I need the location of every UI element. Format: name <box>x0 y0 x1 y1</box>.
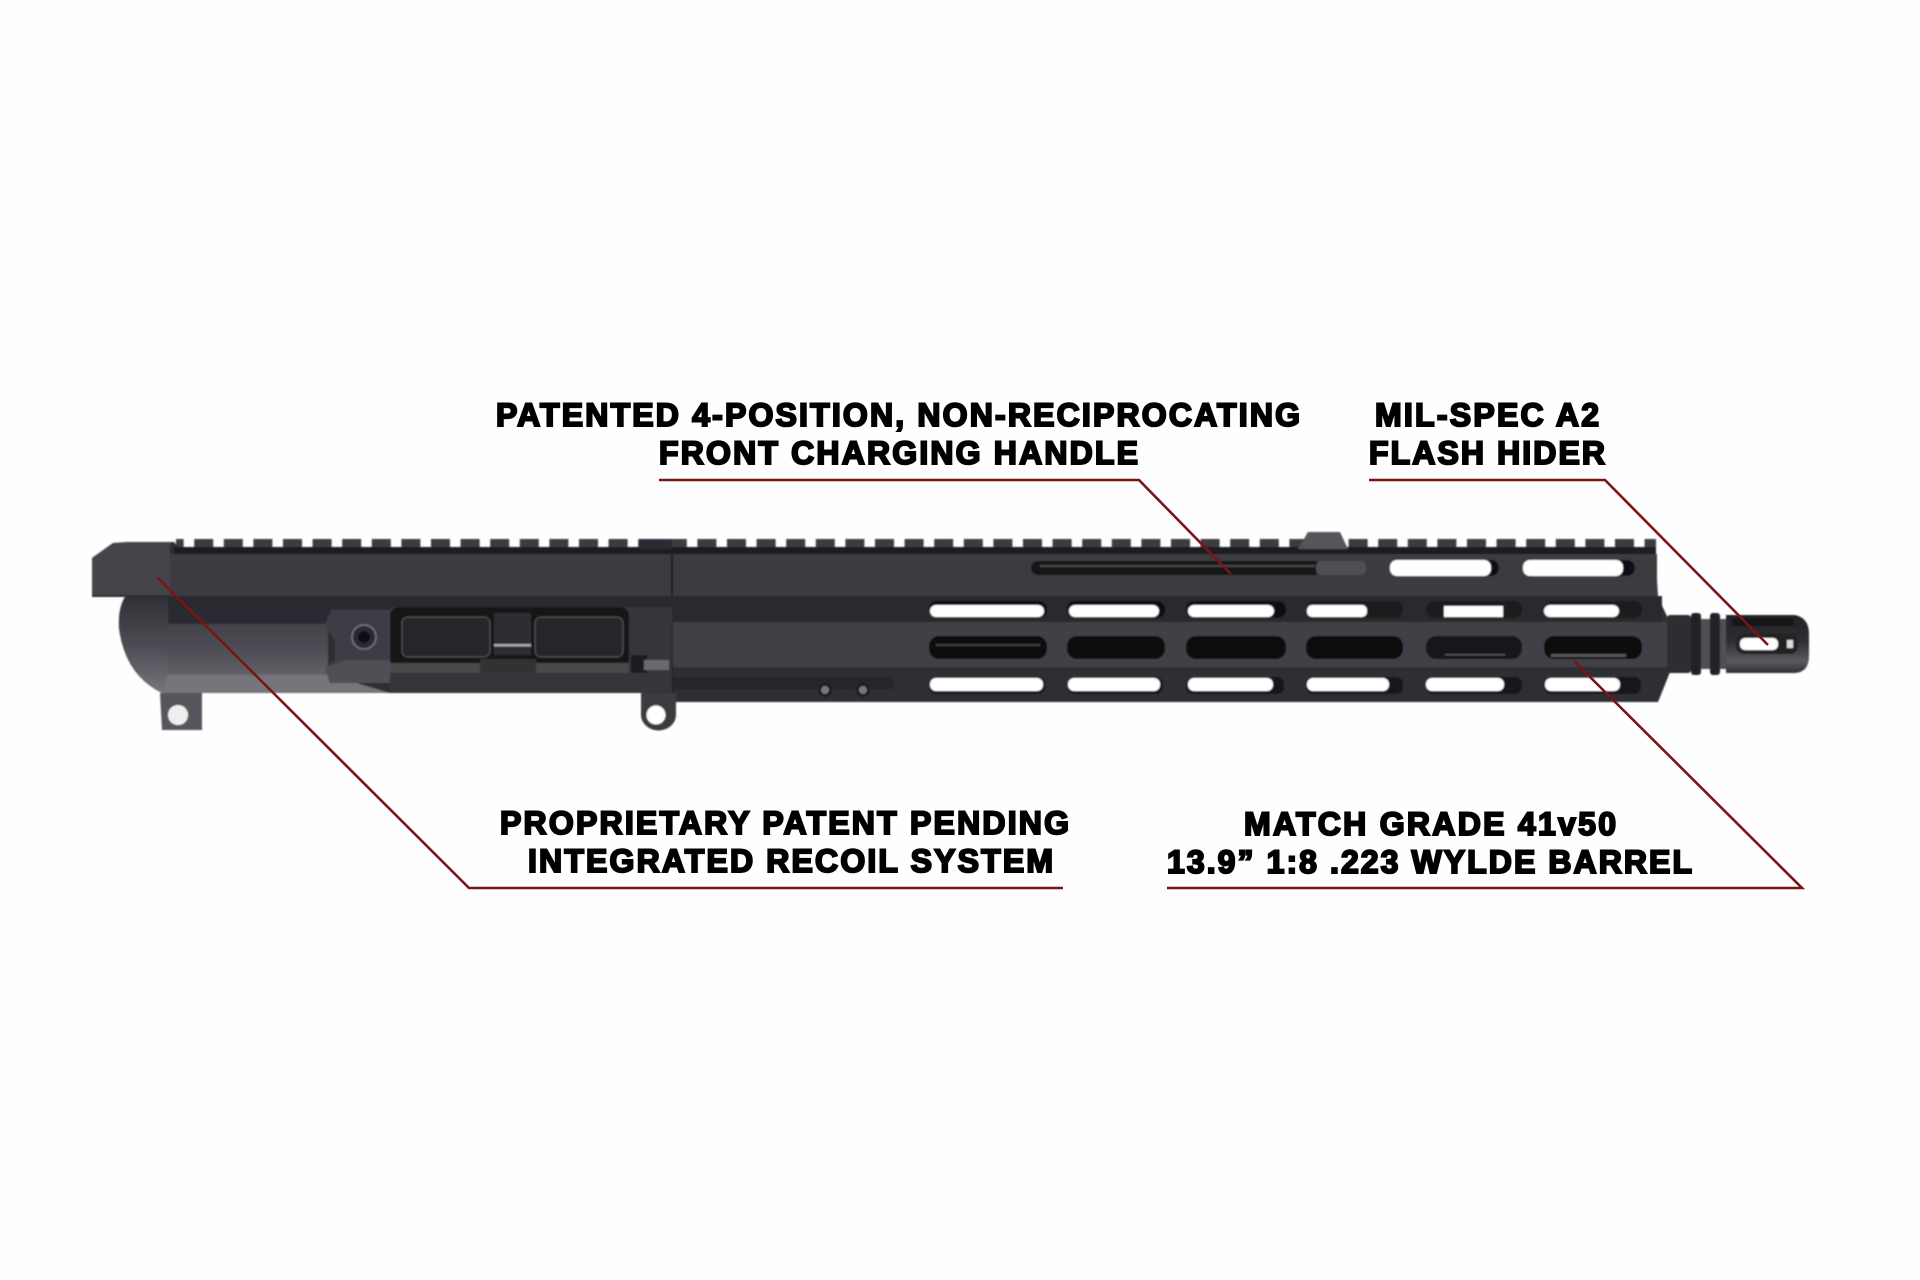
product photo: rifle upper receiver <box>92 532 1809 730</box>
heading: recoil system: INTEGRATED RECOIL SYSTEM <box>528 843 1053 879</box>
heading: barrel: MATCH GRADE 41v50 <box>1244 806 1616 842</box>
forward assist <box>631 655 669 673</box>
M-LOK slots: lower row <box>929 677 1641 694</box>
side panel bright strip <box>162 675 390 693</box>
heading: charging handle <box>496 397 1300 471</box>
upper side band <box>170 554 1657 596</box>
callout: flash hider <box>1369 397 1768 645</box>
top rail shadow strip <box>174 547 1656 554</box>
heading: recoil system: PROPRIETARY PATENT PENDING <box>500 805 1069 841</box>
callout: charging handle <box>496 397 1300 574</box>
side panel upper shadow <box>168 596 390 624</box>
pivot pins <box>673 677 893 697</box>
leader line: recoil system <box>158 578 1063 888</box>
rear cap <box>92 542 170 595</box>
rail block at seam <box>639 539 672 549</box>
handguard lower band <box>673 670 1658 702</box>
rear takedown lug <box>160 693 202 730</box>
M-LOK slots: top row <box>1390 560 1635 576</box>
leader line: charging handle <box>659 480 1231 574</box>
receiver and handguard silhouette <box>92 542 1672 702</box>
receiver mid band <box>390 607 672 693</box>
heading: flash hider: FLASH HIDER <box>1369 435 1605 471</box>
M-LOK slots: middle row <box>929 636 1642 659</box>
charging handle nub <box>1298 532 1348 549</box>
rear block with screw <box>325 610 390 683</box>
receiver seam <box>671 548 673 693</box>
heading: charging handle: PATENTED 4-POSITION, NON-RECIPROCATING <box>496 397 1300 433</box>
heading: flash hider: MIL-SPEC A2 <box>1375 397 1599 433</box>
callout: recoil system <box>158 578 1069 888</box>
handguard shadow band <box>390 596 1662 622</box>
leader line: barrel <box>1167 662 1802 888</box>
M-LOK slots: upper row <box>929 601 1642 618</box>
leader line: flash hider <box>1369 480 1768 645</box>
ejection port dust cover <box>390 607 629 673</box>
front pivot lug <box>641 693 676 730</box>
lower side panel <box>168 596 328 693</box>
heading: flash hider <box>1369 397 1605 471</box>
callout: barrel <box>1167 662 1802 888</box>
heading: barrel: 13.9” 1:8 .223 WYLDE BARREL <box>1167 844 1692 880</box>
A2 flash hider and barrel nut <box>1667 613 1809 675</box>
picatinny top rail teeth <box>176 539 1656 549</box>
heading: recoil system <box>500 805 1069 879</box>
rear curved housing <box>119 597 172 693</box>
handguard mid band <box>673 622 1672 667</box>
charging handle slot <box>1031 561 1366 575</box>
heading: charging handle: FRONT CHARGING HANDLE <box>659 435 1138 471</box>
heading: barrel <box>1167 806 1692 880</box>
